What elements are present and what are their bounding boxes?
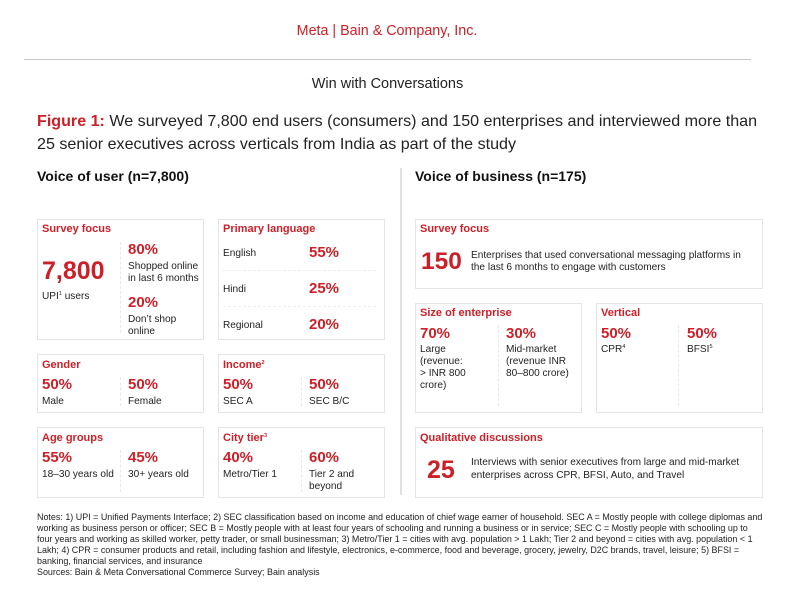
stat: tier 2: 60% (309, 449, 339, 466)
stat: tier 2: Tier 2 and (309, 469, 354, 480)
footnotes and sources: Sources: Bain & Meta Conversational Commerce Survey; Bain analysis (37, 567, 320, 577)
stat: mid-market: (revenue INR (506, 356, 566, 367)
panel: primary language (218, 219, 385, 340)
panel: age groups (37, 427, 204, 498)
stat: 30+: 45% (128, 449, 158, 466)
title: 25 senior executives across verticals from India as part of the study (37, 135, 516, 153)
heading: voice of business: Voice of business (n=175) (415, 168, 586, 184)
stat: tier 2 (309, 449, 354, 492)
stat: mid-market: Mid-market (506, 344, 556, 355)
header: source: Meta | Bain & Company, Inc. (297, 23, 477, 39)
row: Hindi: 25% (309, 280, 339, 297)
stat: BFSI: BFSI5 (687, 344, 712, 355)
stat: metro: Metro/Tier 1 (223, 469, 277, 480)
stat: 20% don't shop online: online (128, 326, 155, 337)
stat: large: 70% (420, 325, 450, 342)
description: the last 6 months to engage with customers (471, 262, 666, 273)
panel heading: Survey focus (42, 223, 111, 235)
panel: vertical (596, 303, 763, 413)
panel heading: Survey focus (420, 223, 489, 235)
stat: SEC B/C (309, 376, 349, 407)
stat: CPR (601, 325, 631, 355)
stat: 18-30 (42, 449, 114, 480)
stat: 18-30: 55% (42, 449, 72, 466)
panel heading: Vertical (601, 307, 640, 319)
footnotes and sources: Lakh; 4) CPR = consumer products and retail, including fashion and lifestyle, electronics, e-commerce, food and beverage, grocery, jewelry, D2C brands, travel, leisure; 5) BFSI = (37, 545, 739, 555)
stat: large: crore) (420, 380, 446, 391)
panel: city tier (218, 427, 385, 498)
stat: female (128, 376, 162, 407)
panel heading: Income2 (223, 359, 265, 371)
stat: 80% shopped online (128, 241, 199, 284)
subtitle: Win with Conversations (312, 76, 463, 92)
stat: 80% shopped online: in last 6 months (128, 273, 199, 284)
panel heading: Primary language (223, 223, 315, 235)
stat: SEC B/C: SEC B/C (309, 396, 349, 407)
footnotes and sources: four years and working as skilled worker, petty trader, or small businessman; 3) Metro/Tier 1 = cities with avg. population > 1 Lakh; Tier 2 and beyond = cities with avg. population < 1 (37, 534, 753, 544)
panel: income (218, 354, 385, 413)
row: English (223, 244, 339, 261)
panel heading: Age groups (42, 432, 103, 444)
stat: 30+: 30+ years old (128, 469, 189, 480)
footnotes and sources: banking, financial services, and insurance (37, 556, 202, 566)
title (37, 112, 757, 153)
footnotes and sources (37, 512, 762, 577)
stat: 30+ (128, 449, 189, 480)
stat: male: Male (42, 396, 64, 407)
panel heading: Qualitative discussions (420, 432, 543, 444)
stat: large (420, 325, 466, 391)
description (471, 250, 741, 273)
stat: 25: 25 (427, 456, 455, 484)
row: English: English (223, 248, 256, 259)
stat: 150: 150 (421, 248, 462, 275)
stat: mid-market (506, 325, 569, 379)
stat: metro (223, 449, 277, 480)
stat: female: Female (128, 396, 162, 407)
stat: SEC A: 50% (223, 376, 253, 393)
stat: BFSI: 50% (687, 325, 717, 342)
row: Hindi: Hindi (223, 284, 246, 295)
row: Hindi (223, 280, 339, 297)
stat: mid-market: 30% (506, 325, 536, 342)
row: Regional: 20% (309, 316, 339, 333)
stat: 20% don't shop online: 20% (128, 294, 158, 311)
description (471, 457, 740, 481)
stat: 20% don't shop online (128, 294, 176, 337)
row: English: 55% (309, 244, 339, 261)
stat: male: 50% (42, 376, 72, 393)
stat: 80% shopped online: Shopped online (128, 261, 198, 272)
stat: mid-market: 80–800 crore) (506, 368, 569, 379)
panel heading: City tier3 (223, 432, 267, 444)
stat: CPR: CPR4 (601, 344, 625, 355)
panel: size of enterprise (415, 303, 582, 413)
stat: male (42, 376, 72, 407)
stat: 18-30: 18–30 years old (42, 469, 114, 480)
footnotes and sources: working as business person or officer; SEC B = Mostly people with at least four years of schooling and running a business or in service; SEC C = Mostly people with schooling up to (37, 523, 748, 533)
stat: SEC B/C: 50% (309, 376, 339, 393)
stat: 20% don't shop online: Don’t shop (128, 314, 176, 325)
description: Interviews with senior executives from large and mid-market (471, 457, 739, 468)
stat: CPR: 50% (601, 325, 631, 342)
stat: large: Large (420, 344, 446, 355)
panel: qualitative discussions (415, 427, 763, 498)
stat: SEC A: SEC A (223, 396, 253, 407)
heading: voice of user: Voice of user (n=7,800) (37, 168, 189, 184)
stat: BFSI (687, 325, 717, 355)
stat: large: > INR 800 (420, 368, 466, 379)
stat: tier 2: beyond (309, 481, 342, 492)
panel: survey focus users (37, 219, 204, 340)
row: Regional: Regional (223, 320, 263, 331)
panel: survey focus enterprises (415, 219, 763, 289)
stat: 7,800 UPI users: UPI1 users (42, 291, 89, 302)
panel heading: Gender (42, 359, 81, 371)
stat: 7,800 UPI users: 7,800 (42, 257, 105, 285)
stat: 7,800 UPI users (42, 257, 105, 302)
stat: female: 50% (128, 376, 158, 393)
stat: large: (revenue: (420, 356, 463, 367)
stat: 80% shopped online: 80% (128, 241, 158, 258)
stat: SEC A (223, 376, 253, 407)
description: enterprises across CPR, BFSI, Auto, and Travel (471, 470, 684, 481)
stat: metro: 40% (223, 449, 253, 466)
footnotes and sources: Notes: 1) UPI = Unified Payments Interface; 2) SEC classification based on income and education of chief wage earner of household. SEC A = Mostly people with college diplomas and (37, 512, 762, 522)
row: Regional (223, 316, 339, 333)
panel: gender (37, 354, 204, 413)
title: Figure 1: We surveyed 7,800 end users (consumers) and 150 enterprises and interviewed more than (37, 112, 757, 130)
panel heading: Size of enterprise (420, 307, 512, 319)
description: Enterprises that used conversational messaging platforms in (471, 250, 741, 261)
